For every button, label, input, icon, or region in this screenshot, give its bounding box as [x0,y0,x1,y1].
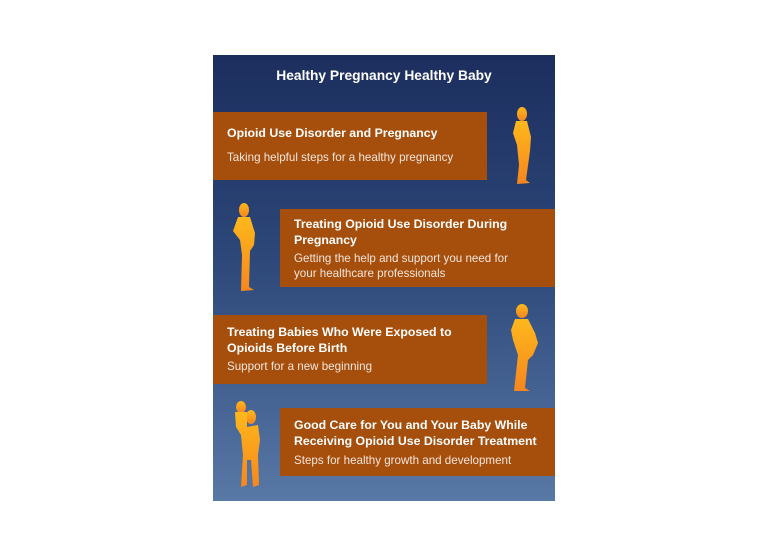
box 4: Receiving Opioid Use Disorder Treatment [294,434,537,448]
box 2 [280,209,555,287]
box 3: Opioids Before Birth [227,341,347,355]
box 4 [280,408,555,476]
title: Healthy Pregnancy Healthy Baby [276,68,492,83]
box 2: Pregnancy [294,233,357,247]
box 1: Opioid Use Disorder and Pregnancy [227,126,437,140]
box 2: Getting the help and support you need for [294,252,508,265]
box 4: Good Care for You and Your Baby While [294,418,527,432]
icon: pregnant woman 1 [513,107,531,184]
icon: pregnant woman 2 [233,203,255,291]
panel: background [213,55,555,501]
box 1: Taking helpful steps for a healthy pregnancy [227,151,453,164]
icon: woman holding baby [235,401,260,487]
box 3 [213,315,487,384]
box 3: Support for a new beginning [227,360,372,373]
box 2: your healthcare professionals [294,267,445,280]
box 1 [213,112,487,180]
box 2: Treating Opioid Use Disorder During [294,217,507,231]
box 4: Steps for healthy growth and development [294,454,511,467]
icon: pregnant woman 3 [511,304,538,391]
box 3: Treating Babies Who Were Exposed to [227,325,452,339]
